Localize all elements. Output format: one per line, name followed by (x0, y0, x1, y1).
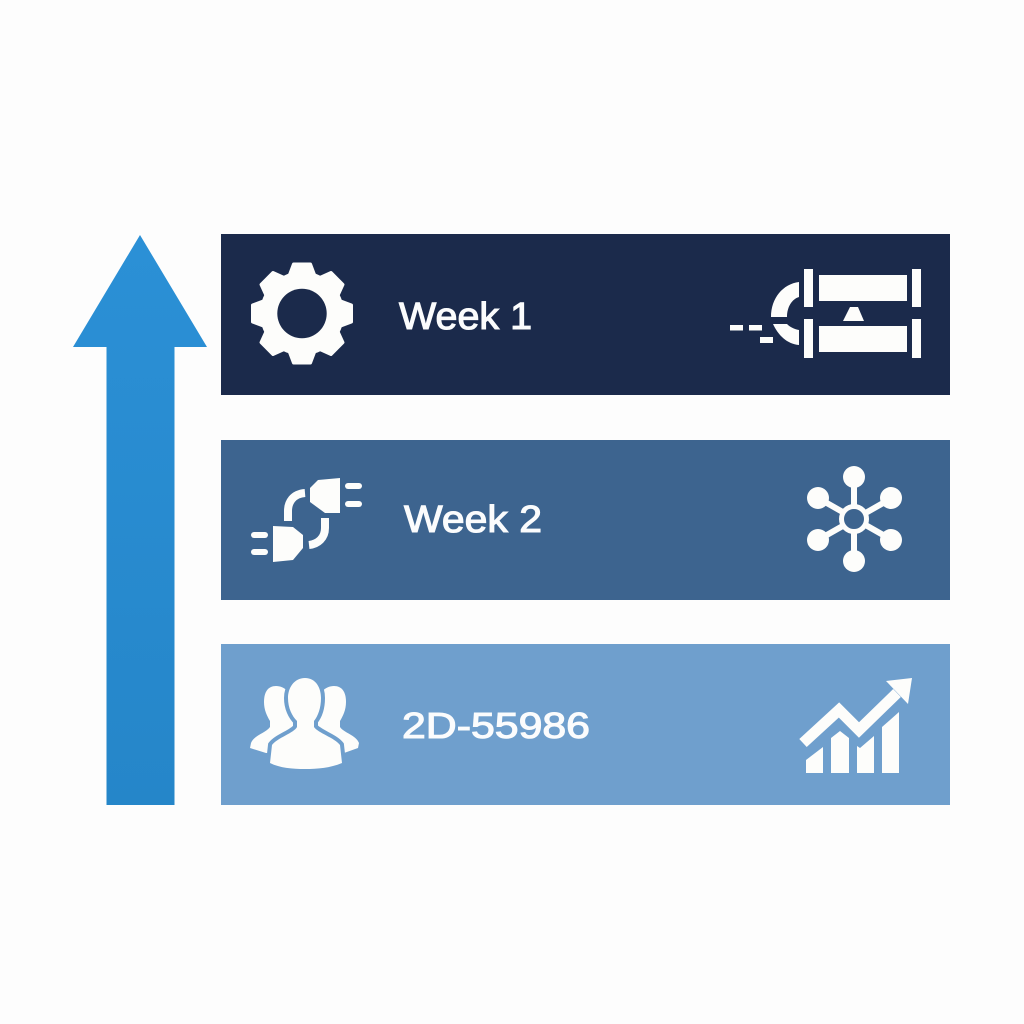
icon: growth chart (803, 678, 912, 773)
icon: people (250, 678, 359, 769)
panel: week 1 (221, 234, 950, 395)
icon: gear (252, 264, 352, 363)
icon: network (807, 466, 902, 572)
icon: plugs (251, 478, 362, 562)
label: code: 2D-55986 (402, 705, 590, 746)
label: week 1: Week 1 (399, 296, 532, 338)
panel: code (221, 644, 950, 805)
panel background: week 2 (221, 440, 950, 600)
panel background: code (221, 644, 950, 805)
panel background: week 1 (221, 234, 950, 395)
label: week 2: Week 2 (404, 499, 542, 541)
upward arrow (73, 235, 207, 805)
panel: week 2 (221, 440, 950, 600)
icon: pipes (730, 269, 921, 358)
